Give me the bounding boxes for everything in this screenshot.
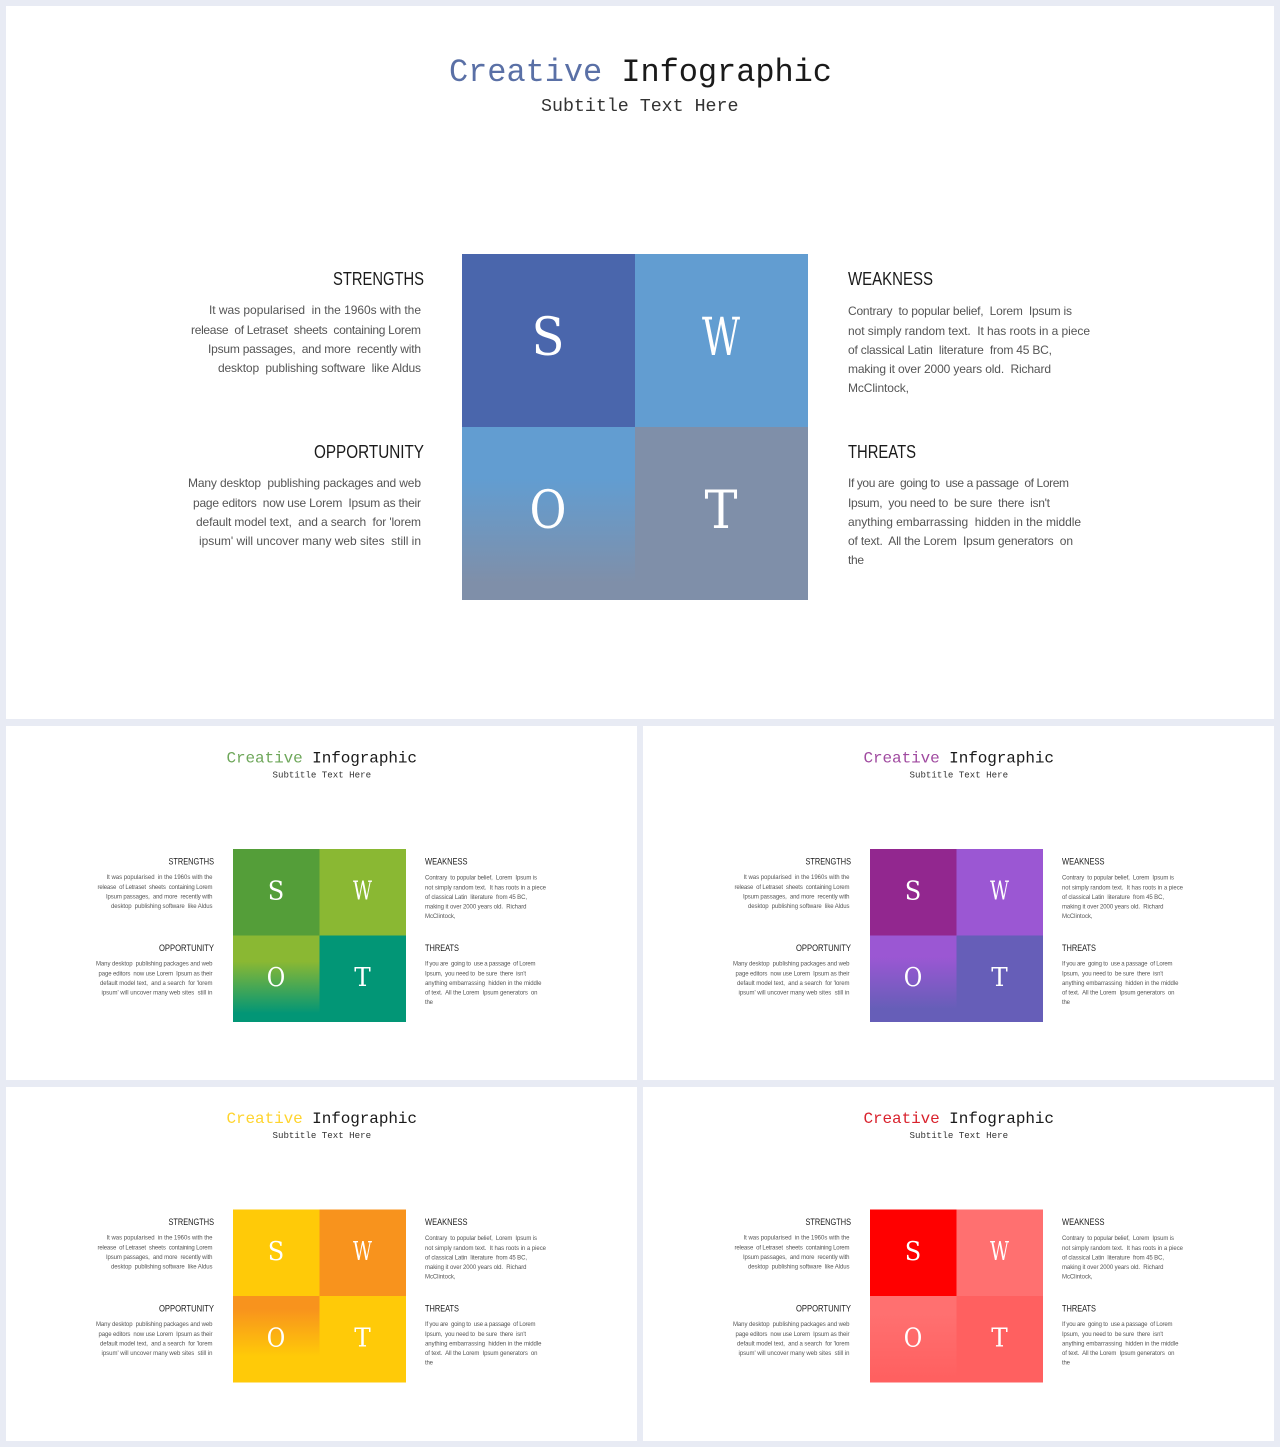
threats text: Ipsum, you need to be sure there isn't (425, 972, 526, 978)
weakness text (425, 1217, 547, 1280)
weakness text: making it over 2000 years old. Richard (425, 904, 526, 910)
SWOT matrix: O (904, 963, 922, 993)
opportunity text: page editors now use Lorem Ipsum as their (98, 972, 212, 978)
opportunity text (733, 1304, 851, 1357)
panel: red SWOT slide (643, 1087, 1274, 1441)
SWOT matrix: O (530, 481, 566, 541)
weakness text: McClintock, (1062, 1274, 1093, 1280)
SWOT matrix: S (905, 876, 921, 906)
threats text: Ipsum, you need to be sure there isn't (425, 1332, 526, 1338)
opportunity text: default model text, and a search for 'lorem (100, 981, 212, 987)
threats text: of text. All the Lorem Ipsum generators on (848, 534, 1073, 548)
threats text (848, 441, 1081, 567)
threats text: anything embarrassing hidden in the middle (1062, 981, 1179, 987)
weakness text (425, 856, 547, 920)
SWOT matrix: W (353, 876, 372, 906)
strengths text (98, 1217, 214, 1270)
opportunity text: Many desktop publishing packages and web (188, 476, 421, 490)
title: Creative Infographic (864, 1110, 1054, 1128)
subtitle: Subtitle Text Here (272, 770, 371, 780)
title: Creative Infographic (226, 750, 417, 768)
strengths text: Ipsum passages, and more recently with (743, 1255, 850, 1261)
strengths text: It was popularised in the 1960s with the (744, 875, 850, 881)
opportunity text: ipsum' will uncover many web sites still in (199, 534, 421, 548)
opportunity text (96, 943, 214, 996)
strengths text: Ipsum passages, and more recently with (743, 894, 850, 900)
SWOT matrix: S (905, 1237, 921, 1267)
SWOT matrix (870, 849, 1043, 1022)
weakness text: making it over 2000 years old. Richard (425, 1265, 526, 1271)
opportunity text: page editors now use Lorem Ipsum as their (98, 1332, 212, 1338)
opportunity text: default model text, and a search for 'lorem (737, 981, 850, 987)
opportunity text: Many desktop publishing packages and web (733, 962, 850, 968)
opportunity text: Many desktop publishing packages and web (96, 962, 213, 968)
opportunity text: ipsum' will uncover many web sites still in (738, 990, 850, 996)
weakness text: McClintock, (1062, 914, 1093, 920)
weakness text: making it over 2000 years old. Richard (1062, 1265, 1164, 1271)
strengths text: release of Letraset sheets containing Lorem (734, 1246, 850, 1252)
SWOT matrix: T (704, 481, 738, 541)
strengths text: desktop publishing software like Aldus (748, 904, 850, 910)
opportunity text: OPPORTUNITY (314, 441, 424, 462)
strengths text: Ipsum passages, and more recently with (106, 1255, 212, 1261)
weakness text: WEAKNESS (1062, 1217, 1104, 1227)
strengths text: release of Letraset sheets containing Lorem (734, 885, 850, 891)
SWOT matrix (233, 849, 406, 1022)
SWOT matrix: T (354, 1324, 371, 1354)
opportunity text: default model text, and a search for 'lorem (737, 1342, 850, 1348)
threats text: Ipsum, you need to be sure there isn't (1062, 1332, 1163, 1338)
threats text: THREATS (1062, 1304, 1096, 1314)
threats text (425, 1304, 542, 1366)
threats text: the (848, 553, 864, 567)
weakness text: not simply random text. It has roots in a piece (1062, 1246, 1184, 1252)
strengths text (734, 856, 851, 910)
weakness text: Contrary to popular belief, Lorem Ipsum is (848, 304, 1072, 318)
strengths text: STRENGTHS (806, 1217, 851, 1227)
threats text: If you are going to use a passage of Lorem (1062, 1322, 1172, 1328)
SWOT matrix: O (904, 1324, 922, 1354)
weakness text (1062, 1217, 1184, 1280)
opportunity text: ipsum' will uncover many web sites still in (102, 1351, 212, 1357)
threats text (425, 943, 542, 1006)
threats text: anything embarrassing hidden in the middle (425, 1342, 542, 1348)
threats text: THREATS (425, 943, 459, 953)
strengths text (191, 268, 424, 375)
strengths text (734, 1217, 851, 1270)
SWOT matrix: T (354, 963, 371, 993)
weakness text: Contrary to popular belief, Lorem Ipsum is (425, 876, 537, 882)
SWOT matrix (233, 1210, 406, 1382)
threats text: of text. All the Lorem Ipsum generators on (425, 1351, 538, 1357)
strengths text: Ipsum passages, and more recently with (208, 342, 421, 356)
weakness text: making it over 2000 years old. Richard (848, 362, 1051, 376)
opportunity text (733, 943, 851, 996)
opportunity text (188, 441, 424, 548)
threats text: If you are going to use a passage of Lorem (848, 476, 1069, 490)
weakness text: of classical Latin literature from 45 BC, (1062, 895, 1164, 901)
weakness text: McClintock, (425, 1274, 456, 1280)
strengths text: It was popularised in the 1960s with the (106, 875, 213, 881)
strengths text: It was popularised in the 1960s with the (106, 1236, 213, 1242)
opportunity text: page editors now use Lorem Ipsum as their (193, 496, 421, 510)
title: Creative Infographic (864, 750, 1054, 768)
SWOT matrix: W (702, 308, 740, 368)
SWOT matrix (462, 254, 808, 600)
strengths text: STRENGTHS (168, 856, 214, 866)
subtitle: Subtitle Text Here (541, 97, 738, 117)
weakness text: WEAKNESS (425, 1217, 468, 1227)
strengths text: STRENGTHS (168, 1217, 214, 1227)
weakness text: not simply random text. It has roots in a piece (425, 886, 547, 892)
threats text (1062, 1304, 1179, 1366)
opportunity text: OPPORTUNITY (159, 1304, 214, 1314)
opportunity text: page editors now use Lorem Ipsum as their (736, 972, 850, 978)
weakness text: of classical Latin literature from 45 BC, (1062, 1256, 1164, 1262)
threats text: If you are going to use a passage of Lorem (425, 962, 536, 968)
threats text: the (1062, 1000, 1071, 1006)
threats text: anything embarrassing hidden in the middle (848, 515, 1081, 529)
threats text: anything embarrassing hidden in the middle (425, 981, 542, 987)
weakness text: not simply random text. It has roots in a piece (425, 1246, 547, 1252)
opportunity text: ipsum' will uncover many web sites still in (102, 990, 212, 996)
panel: green SWOT slide (6, 726, 637, 1080)
weakness text: not simply random text. It has roots in a piece (848, 324, 1090, 338)
threats text: If you are going to use a passage of Lorem (425, 1322, 536, 1328)
weakness text: not simply random text. It has roots in a piece (1062, 886, 1184, 892)
SWOT matrix: S (532, 308, 564, 368)
title: Creative Infographic (226, 1110, 417, 1128)
SWOT matrix: O (267, 1324, 285, 1354)
opportunity text: OPPORTUNITY (796, 1304, 851, 1314)
weakness text (848, 268, 1090, 395)
threats text: of text. All the Lorem Ipsum generators on (425, 990, 538, 996)
subtitle: Subtitle Text Here (272, 1130, 371, 1141)
SWOT matrix: O (267, 963, 285, 993)
threats text: of text. All the Lorem Ipsum generators on (1062, 1351, 1174, 1357)
weakness text: Contrary to popular belief, Lorem Ipsum is (1062, 876, 1174, 882)
opportunity text: default model text, and a search for 'lorem (100, 1342, 212, 1348)
strengths text: desktop publishing software like Aldus (748, 1264, 850, 1270)
weakness text: WEAKNESS (425, 856, 468, 866)
threats text: anything embarrassing hidden in the middle (1062, 1342, 1179, 1348)
threats text: If you are going to use a passage of Lorem (1062, 962, 1172, 968)
threats text: Ipsum, you need to be sure there isn't (1062, 972, 1163, 978)
weakness text: McClintock, (425, 914, 456, 920)
opportunity text: OPPORTUNITY (159, 943, 214, 953)
threats text: the (425, 1000, 434, 1006)
threats text: the (1062, 1360, 1071, 1366)
panel: large blue SWOT slide (6, 6, 1274, 719)
opportunity text: default model text, and a search for 'lorem (196, 515, 421, 529)
subtitle: Subtitle Text Here (910, 1130, 1008, 1141)
opportunity text: Many desktop publishing packages and web (733, 1322, 850, 1328)
strengths text: It was popularised in the 1960s with the (744, 1236, 850, 1242)
strengths text: release of Letraset sheets containing Lorem (98, 885, 212, 891)
SWOT matrix: W (990, 876, 1009, 906)
threats text: of text. All the Lorem Ipsum generators on (1062, 990, 1174, 996)
weakness text: of classical Latin literature from 45 BC, (848, 343, 1052, 357)
threats text: THREATS (425, 1304, 459, 1314)
strengths text: release of Letraset sheets containing Lorem (98, 1246, 212, 1252)
SWOT matrix: S (268, 876, 284, 906)
opportunity text: ipsum' will uncover many web sites still in (738, 1351, 850, 1357)
threats text: the (425, 1360, 434, 1366)
weakness text: Contrary to popular belief, Lorem Ipsum is (425, 1236, 537, 1242)
weakness text: of classical Latin literature from 45 BC, (425, 1256, 527, 1262)
weakness text: of classical Latin literature from 45 BC, (425, 895, 527, 901)
weakness text: WEAKNESS (848, 268, 933, 289)
threats text: THREATS (848, 441, 916, 462)
SWOT matrix: S (268, 1237, 284, 1267)
SWOT matrix: W (990, 1237, 1009, 1267)
SWOT matrix: T (991, 1324, 1008, 1354)
strengths text (98, 856, 214, 910)
strengths text: It was popularised in the 1960s with the (209, 303, 421, 317)
strengths text: desktop publishing software like Aldus (111, 904, 212, 910)
weakness text: McClintock, (848, 381, 909, 395)
strengths text: desktop publishing software like Aldus (111, 1264, 212, 1270)
strengths text: desktop publishing software like Aldus (218, 361, 421, 375)
weakness text (1062, 856, 1184, 920)
opportunity text: page editors now use Lorem Ipsum as their (736, 1332, 850, 1338)
SWOT matrix: W (353, 1237, 372, 1267)
threats text (1062, 943, 1179, 1006)
weakness text: making it over 2000 years old. Richard (1062, 904, 1164, 910)
title: Creative Infographic (449, 54, 832, 91)
opportunity text (96, 1304, 214, 1357)
strengths text: STRENGTHS (333, 268, 424, 289)
panel: purple SWOT slide (643, 726, 1274, 1080)
threats text: THREATS (1062, 943, 1096, 953)
strengths text: STRENGTHS (806, 856, 851, 866)
strengths text: release of Letraset sheets containing Lorem (191, 323, 421, 337)
subtitle: Subtitle Text Here (910, 770, 1008, 780)
SWOT matrix: T (991, 963, 1008, 993)
opportunity text: Many desktop publishing packages and web (96, 1322, 213, 1328)
panel: yellow SWOT slide (6, 1087, 637, 1441)
weakness text: WEAKNESS (1062, 856, 1104, 866)
opportunity text: OPPORTUNITY (796, 943, 851, 953)
weakness text: Contrary to popular belief, Lorem Ipsum is (1062, 1236, 1174, 1242)
threats text: Ipsum, you need to be sure there isn't (848, 496, 1051, 510)
SWOT matrix (870, 1210, 1043, 1382)
strengths text: Ipsum passages, and more recently with (106, 894, 212, 900)
